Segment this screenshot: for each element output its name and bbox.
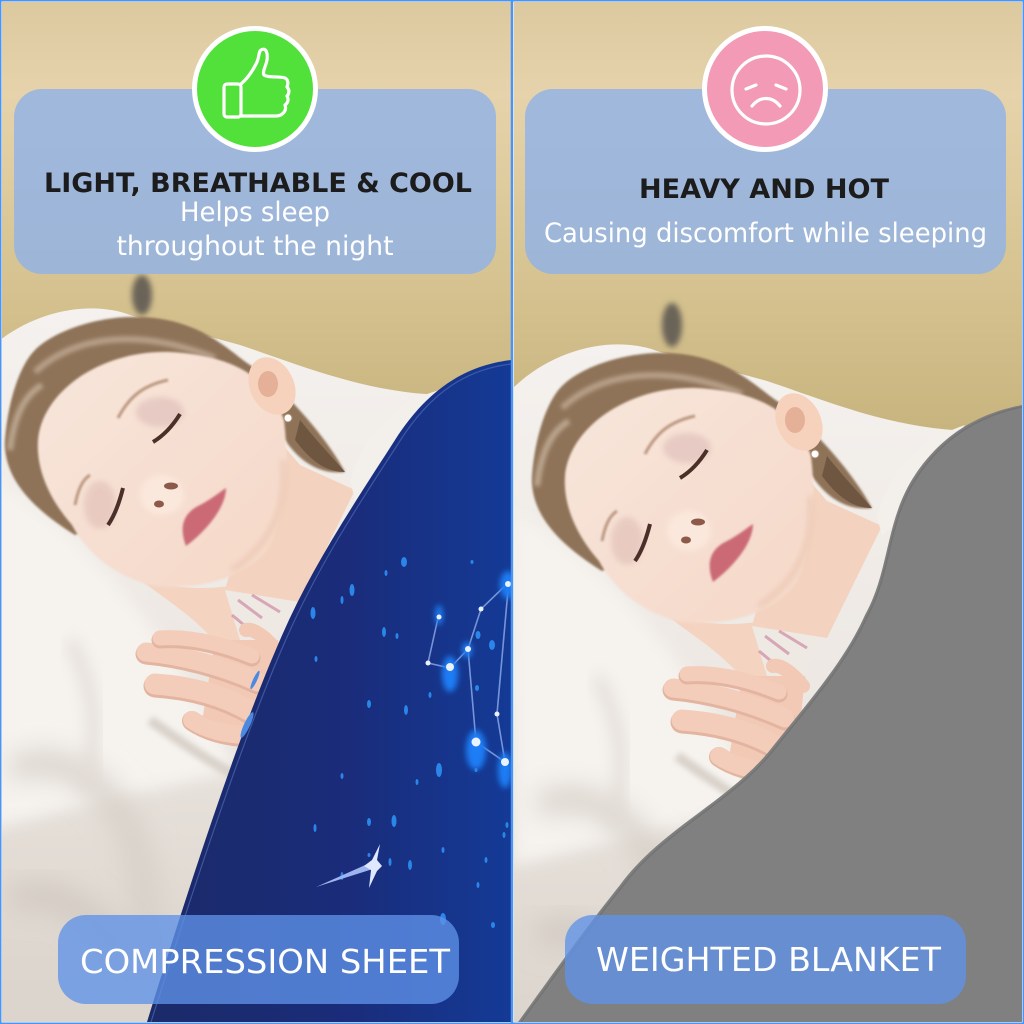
star points [426,581,511,766]
right pajama sleeve [877,425,965,536]
label: compression sheet [58,915,459,1004]
sheet stars near edge [240,670,260,738]
scattered stars [310,557,508,928]
constellation glows [435,571,516,788]
label: weighted blanket: WEIGHTED BLANKET [596,940,942,979]
right girl [532,353,882,786]
shooting star [316,864,371,887]
weighted blanket [518,405,1022,1022]
left description: throughout the night [116,231,394,262]
label: weighted blanket [565,915,966,1004]
left pajama sleeve [352,390,438,494]
panel: right drawback box [525,89,1006,274]
right scene panel [513,2,1022,1022]
right heading: HEAVY AND HOT [639,174,890,205]
icon: thumbs up [194,28,316,150]
left description [116,197,394,262]
left girl [5,317,355,750]
compression sheet [147,360,516,1022]
left scene panel [0,2,516,1022]
constellation lines [428,583,508,762]
left description: Helps sleep [180,197,330,228]
panel: left benefit box [14,89,496,274]
icon: sad face [704,28,826,150]
right description: Causing discomfort while sleeping [544,218,987,249]
left bedding [2,308,427,1022]
right bedding [514,344,952,1022]
left heading: LIGHT, BREATHABLE & COOL [44,168,472,199]
label: compression sheet: COMPRESSION SHEET [80,942,451,981]
